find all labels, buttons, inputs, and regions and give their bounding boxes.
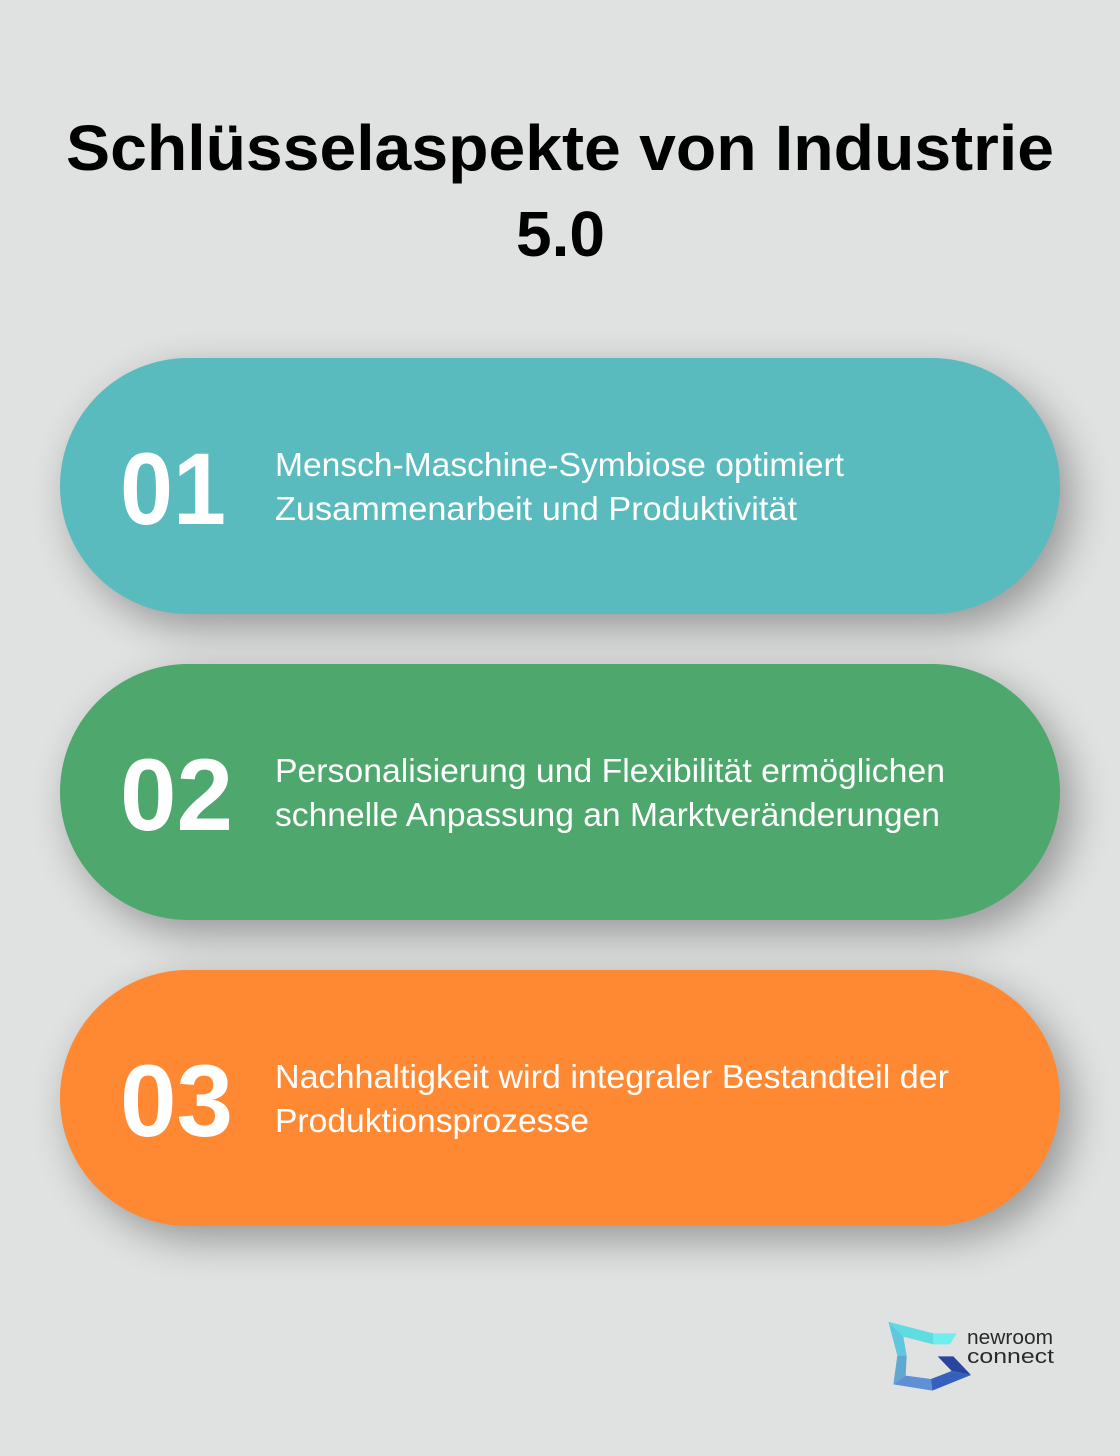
- title: [66, 112, 1054, 270]
- card 02 text: schnelle Anpassung an Marktveränderungen: [275, 796, 940, 833]
- panel: card 01: [60, 358, 1060, 614]
- card 01 number: 01: [120, 432, 226, 546]
- title: 5.0: [516, 198, 605, 270]
- card 02 text: [275, 752, 945, 833]
- icon: logo mark: [888, 1322, 971, 1391]
- logo wordmark: newroom: [967, 1327, 1053, 1349]
- card 01 text: Zusammenarbeit und Produktivität: [275, 490, 797, 527]
- logo wordmark: [967, 1327, 1055, 1368]
- panel: card 02: [60, 664, 1060, 920]
- card 02 number: 02: [120, 738, 233, 852]
- card 01 text: [275, 446, 844, 527]
- card 02 text: Personalisierung und Flexibilität ermöglichen: [275, 752, 945, 789]
- card 03 text: Nachhaltigkeit wird integraler Bestandteil der: [275, 1058, 949, 1095]
- card 03 text: Produktionsprozesse: [275, 1102, 589, 1139]
- card 03 text: [275, 1058, 949, 1139]
- title: Schlüsselaspekte von Industrie: [66, 112, 1054, 184]
- card 03 number: 03: [120, 1044, 233, 1158]
- card 01 text: Mensch-Maschine-Symbiose optimiert: [275, 446, 844, 483]
- panel: card 03: [60, 970, 1060, 1226]
- logo wordmark: connect: [967, 1346, 1055, 1368]
- logo: newroom connect: [888, 1322, 1055, 1391]
